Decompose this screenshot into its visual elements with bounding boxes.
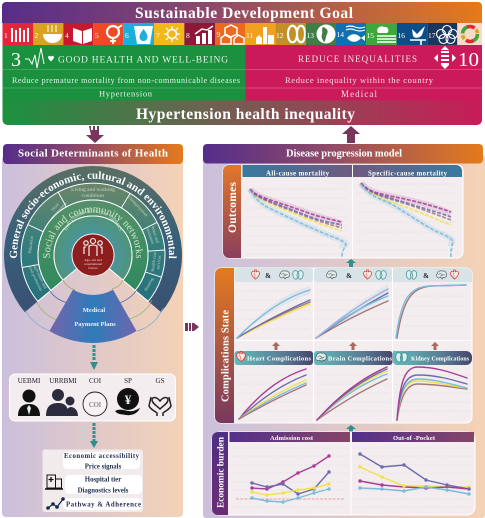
chart: admission cost <box>231 448 348 507</box>
header: comorbidity heart first <box>234 268 313 282</box>
panel: medical payment plans <box>50 290 136 343</box>
icon: GS hands and heart <box>149 397 171 416</box>
header: kidney complications: Kidney Complications <box>411 356 470 362</box>
title bar <box>2 2 482 23</box>
goal number 10: 10 <box>458 49 479 71</box>
arrow: economic burden to complications <box>346 425 356 432</box>
label: general socio-economic: General socio-economic, cultural and environmental <box>10 171 177 258</box>
panel: sustainable development goal header <box>2 2 482 125</box>
icon: heartbeat <box>25 48 54 68</box>
ring segment labels: services <box>155 255 162 270</box>
heading: social determinants <box>3 144 183 164</box>
SDG 13 tile: 13 <box>306 31 314 40</box>
ring segment labels: conditions <box>82 193 104 199</box>
header: admission cost: Admission cost <box>270 435 314 442</box>
ring segment labels: Living and working <box>71 187 115 193</box>
SDG 8 tile: 8 <box>186 31 190 40</box>
ring segment labels <box>27 187 162 293</box>
SDG 9 tile: 9 <box>216 30 220 39</box>
ring segment labels: environment <box>49 200 68 220</box>
SDG 1 tile: 1 <box>4 31 8 40</box>
chart: brain complications <box>317 367 390 420</box>
arrow: up from disease model <box>342 126 360 143</box>
ring segment labels: Unemployment <box>127 194 150 218</box>
panel: social determinants of health <box>2 144 183 517</box>
header: out-of-pocket: Out-of -Pocket <box>393 435 436 442</box>
panel: medical payment plans: Payment Plans <box>74 321 116 328</box>
label: economic burden: Economic burden <box>216 436 226 508</box>
heading: hypertension health inequality: Hypertension health inequality <box>136 106 355 123</box>
target text: Reduce premature mortality from non-communicable diseases <box>12 76 240 85</box>
chart: specific-cause mortality <box>358 183 456 257</box>
header: admission cost <box>230 432 350 442</box>
arrow: payment plans to insurance <box>90 345 98 370</box>
text: economic accessibility: Economic accessibility <box>64 453 140 460</box>
SDG 16 tile: 16 <box>398 31 405 40</box>
text: hospital tier: Hospital tier <box>85 476 121 484</box>
SDG 17 tile: 17 <box>428 31 436 40</box>
arrows: complications to comorbidity <box>272 342 439 350</box>
icon: pathway <box>46 497 65 510</box>
label: complications state: Complications State <box>220 310 232 402</box>
title bar: Sustainable Development Goal <box>135 5 354 22</box>
panel: complications state <box>215 268 472 423</box>
label: medical: Medical <box>341 89 377 99</box>
panel: reduce inequalities <box>246 45 482 101</box>
ring segment labels: Education <box>27 235 34 254</box>
SDG 4 tile: 4 <box>65 31 69 40</box>
icon: age, sex and constitutional factors: Age, sex and <box>84 258 102 263</box>
icon: age, sex and constitutional factors <box>72 234 114 276</box>
icon: inequality <box>434 46 456 69</box>
icon: UEBMI employee <box>18 390 40 416</box>
label: hypertension: Hypertension <box>99 88 153 98</box>
header: comorbidity brain first: & <box>346 272 352 280</box>
labels: insurance names: UEBMI <box>18 377 41 385</box>
panel: economic burden <box>212 432 475 515</box>
chart: out-of-pocket <box>354 448 472 507</box>
heading: social determinants: Social Determinants of Health <box>18 148 168 160</box>
SDG 7 tile: 7 <box>156 31 160 40</box>
labels: insurance names: URRBMI <box>49 377 77 385</box>
SDG 13 tile <box>306 23 336 45</box>
SDG 12 tile: 12 <box>276 31 284 40</box>
ring segment labels: Agriculture and <box>32 263 48 290</box>
icon: SP yen in hand: ¥ <box>125 392 132 407</box>
SDG 14 tile <box>336 23 366 45</box>
SDG 6 tile <box>123 23 154 45</box>
header: out-of-pocket <box>352 432 474 442</box>
label: outcomes <box>223 165 241 258</box>
header: all-cause mortality: All-cause mortality <box>266 170 330 178</box>
heading: disease progression model: Disease progression model <box>286 148 402 160</box>
SDG 15 tile <box>366 23 397 45</box>
label: social and community networks: Social and coummunity networks <box>43 207 143 258</box>
ring segment labels: sanitation <box>146 227 156 246</box>
arrow: insurance to mechanisms <box>90 423 98 448</box>
panel: medical payment plans: Medical <box>83 307 105 314</box>
chart: all-cause mortality <box>246 189 346 257</box>
heading: reduce inequalities: REDUCE INEQUALITIES <box>298 54 417 64</box>
chart: rainbow determinants wheel <box>4 166 182 312</box>
ring segment labels: Housing <box>143 276 155 292</box>
SDG wheel tile <box>457 23 482 45</box>
SDG 16 tile <box>397 23 427 45</box>
header: comorbidity heart first: & <box>265 272 271 280</box>
SDG 12 tile <box>275 23 306 45</box>
icon: COI circle: COI <box>89 401 102 409</box>
ring segment labels: food production <box>27 265 44 293</box>
label: complications state <box>215 268 234 423</box>
heading: good health: GOOD HEALTH AND WELL-BEING <box>58 56 228 66</box>
SDG 9 tile <box>215 23 245 45</box>
icon: hospital <box>45 475 63 489</box>
panel: mechanisms <box>42 450 143 512</box>
SDG 11 tile: 11 <box>246 31 253 40</box>
text: diagnostics levels: Diagnostics levels <box>78 488 129 494</box>
header: comorbidity kidney first <box>393 268 472 282</box>
heading: hypertension health inequality <box>2 100 482 125</box>
arrow: down to social determinants <box>86 126 104 143</box>
SDG 15 tile: 15 <box>366 31 374 40</box>
text: pathway and adherence: Pathway & Adherence <box>66 502 141 508</box>
header: heart complications <box>234 351 313 365</box>
ring segment labels: Work <box>50 201 61 212</box>
header: kidney complications <box>393 351 472 365</box>
SDG 1 tile <box>2 23 33 45</box>
chart: heart complications <box>239 369 310 419</box>
label: outcomes: Outcomes <box>227 181 239 233</box>
icon: URRBMI residents <box>46 389 78 416</box>
panel: disease progression model <box>203 144 485 518</box>
icon: age, sex and constitutional factors: constitutional <box>84 262 102 266</box>
header: brain complications <box>314 351 392 365</box>
icon: age, sex and constitutional factors: factors <box>88 266 98 270</box>
panel: outcomes <box>223 165 463 258</box>
SDG 5 tile <box>93 23 123 45</box>
arrow: complications to outcomes <box>346 259 356 267</box>
header: comorbidity brain first <box>314 268 392 282</box>
labels: insurance names: SP <box>124 377 132 385</box>
labels: insurance names <box>18 377 165 385</box>
SDG 8 tile <box>184 23 215 45</box>
SDG 7 tile <box>154 23 184 45</box>
chart: brain comorbidity <box>316 284 390 338</box>
header: specific-cause mortality <box>353 165 462 178</box>
panel: insurance types <box>10 374 176 421</box>
SDG 11 tile <box>245 23 275 45</box>
icon: SP yen in hand <box>115 388 140 415</box>
header: comorbidity kidney first: & <box>423 272 429 280</box>
label: individual lifestyle factors: Individual lifestyle factors <box>62 208 122 231</box>
chart: kidney complications <box>395 367 470 420</box>
icon: COI circle <box>83 392 107 416</box>
header: heart complications: Heart Complications <box>247 356 311 362</box>
text: price signals: Price signals <box>85 464 122 470</box>
SDG 14 tile: 14 <box>336 30 344 39</box>
header: brain complications: Brain Complications <box>328 356 392 362</box>
SDG 6 tile: 6 <box>125 31 129 40</box>
chart: kidney comorbidity <box>395 285 468 338</box>
header: all-cause mortality <box>242 165 352 178</box>
heading: disease progression model <box>203 144 483 164</box>
panel: good health and well-being <box>2 45 246 101</box>
SDG 5 tile: 5 <box>95 31 99 40</box>
SDG 2 tile <box>33 23 63 45</box>
labels: insurance names: GS <box>156 377 165 385</box>
labels: insurance names: COI <box>89 377 102 385</box>
SDG icon strip <box>2 23 482 45</box>
goal number 3: 3 <box>11 49 21 71</box>
ring segment labels: Health care <box>150 252 157 272</box>
arrows: wheel to payment plans <box>25 280 163 332</box>
SDG 2 tile: 2 <box>34 31 38 40</box>
chart: heart comorbidity <box>237 286 310 338</box>
target text: Reduce inequality within the country <box>285 75 434 85</box>
SDG 17 tile <box>427 23 458 45</box>
header: specific-cause mortality: Specific-cause mortality <box>368 170 448 178</box>
label: economic burden <box>212 432 228 515</box>
arrow: social determinants to disease model <box>185 323 199 331</box>
ring segment labels: Water and <box>150 225 161 244</box>
SDG 4 tile <box>63 23 93 45</box>
